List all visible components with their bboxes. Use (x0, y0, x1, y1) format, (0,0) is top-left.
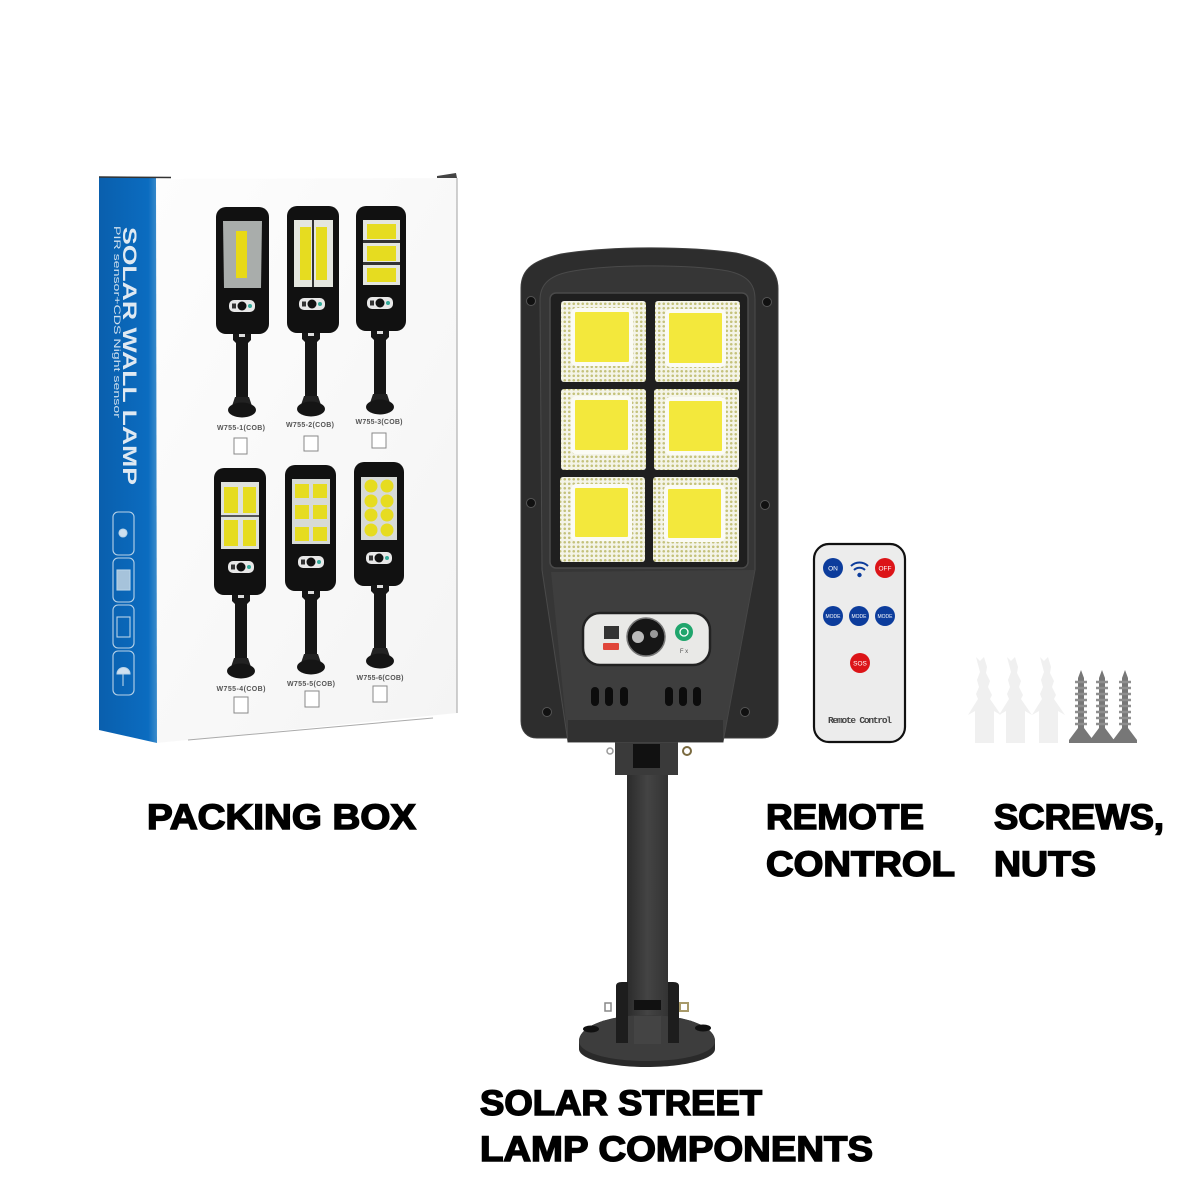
product lamp W755-5: W755-5(COB) (287, 681, 335, 688)
product lamp W755-1 (216, 207, 269, 454)
label: screws, nuts: SCREWS, (994, 798, 1164, 837)
wall anchors (968, 657, 1065, 743)
label: remote control (766, 798, 955, 884)
spine title: SOLAR WALL LAMP (118, 227, 139, 485)
remote control (814, 544, 905, 742)
sensor panel (583, 613, 710, 665)
label: remote control: REMOTE (766, 798, 924, 837)
label: screws, nuts (994, 798, 1164, 884)
lamp fixing screws (526, 296, 772, 716)
product lamp W755-4 (214, 468, 266, 713)
remote buttons: MODE (852, 614, 867, 620)
label: solar street lamp components (480, 1084, 873, 1169)
screws (1069, 670, 1137, 743)
vent slots (591, 687, 701, 706)
label: screws, nuts: NUTS (994, 845, 1096, 884)
panel: packing box (99, 173, 457, 743)
spine feature icons (113, 512, 134, 695)
label: solar street lamp components: SOLAR STREET (480, 1084, 762, 1123)
label: remote control: CONTROL (766, 845, 955, 884)
label: packing box: PACKING BOX (147, 798, 417, 837)
solar street lamp (521, 248, 778, 1067)
lamp housing (521, 248, 778, 742)
product lamp W755-4: W755-4(COB) (216, 686, 266, 693)
remote buttons: SOS (853, 660, 868, 668)
product lamp W755-3: W755-3(COB) (356, 419, 402, 426)
LED window (550, 293, 748, 568)
lamp mounting base (579, 982, 715, 1067)
spine subtitle: PIR sensor+CDS Night sensor (112, 226, 122, 418)
icon: wifi signal (851, 562, 868, 576)
lamp pole (627, 770, 668, 1020)
lamp bracket (607, 742, 691, 775)
remote buttons: MODE (826, 614, 841, 620)
remote label: Remote Control (828, 715, 892, 726)
product lamp W755-2 (286, 206, 339, 451)
remote buttons (823, 558, 895, 673)
label: solar street lamp components: LAMP COMPONENTS (480, 1130, 873, 1169)
remote buttons: MODE (878, 614, 893, 620)
product lamp W755-5 (285, 465, 336, 707)
remote buttons: ON (828, 566, 838, 572)
remote buttons: OFF (878, 566, 892, 572)
product lamp W755-3 (356, 206, 406, 448)
box front face (155, 178, 457, 743)
product lamp W755-6: W755-6(COB) (356, 675, 404, 682)
box spine (99, 177, 157, 743)
product lamp W755-6 (354, 462, 404, 702)
sensor panel: F x (680, 649, 688, 655)
product lamp W755-1: W755-1(COB) (217, 425, 265, 432)
product lamp W755-2: W755-2(COB) (286, 422, 334, 429)
